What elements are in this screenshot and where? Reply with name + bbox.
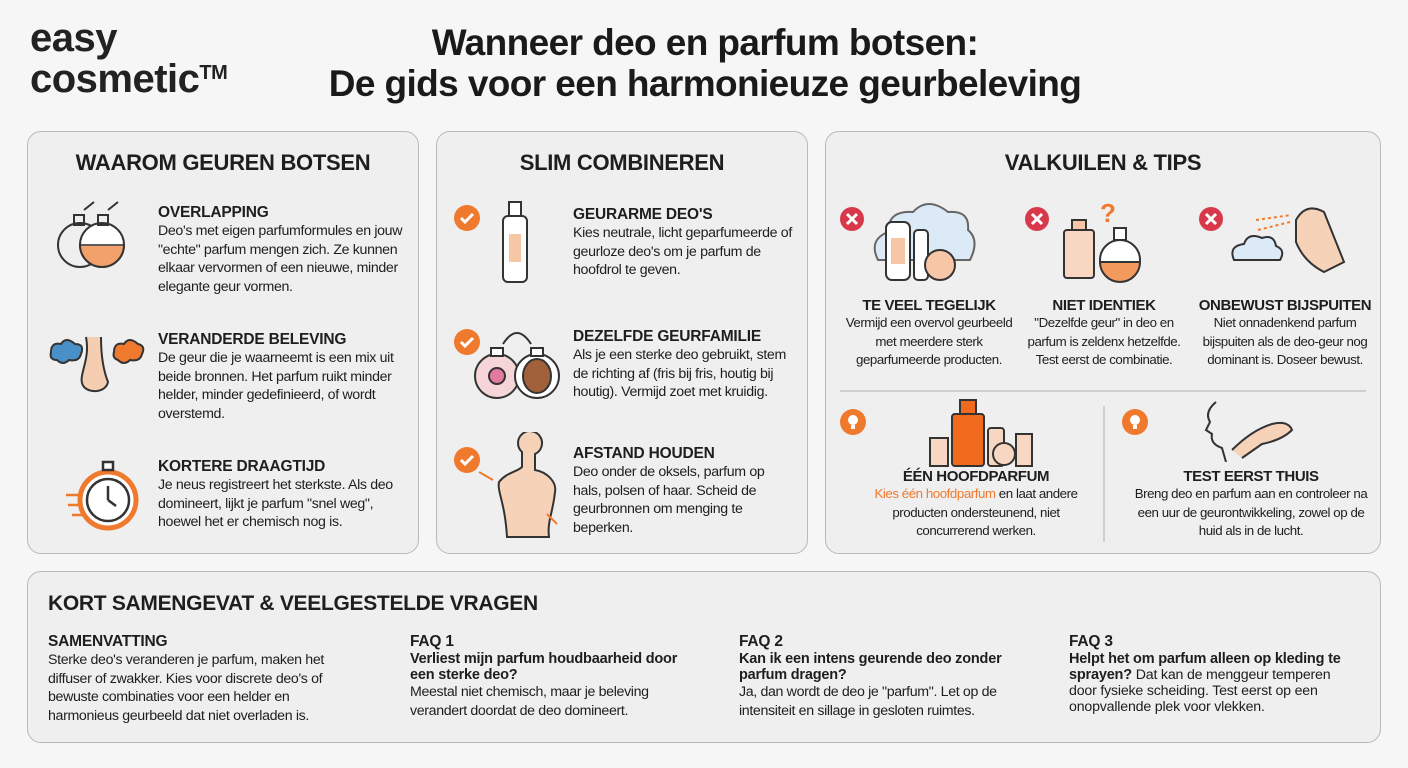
heading: KORT SAMENGEVAT & VEELGESTELDE VRAGEN — [48, 592, 538, 615]
icon: bulb 1 — [840, 409, 866, 435]
icon: bulb 2 — [1122, 409, 1148, 435]
icon: cloud products — [874, 203, 976, 281]
icon: check 1 — [454, 205, 480, 231]
text: faq 1: FAQ 1 — [410, 633, 454, 650]
icon: face and wrist — [1204, 401, 1294, 462]
logo: easy — [30, 16, 117, 60]
text: te veel tegelijk: TE VEEL TEGELIJK — [862, 297, 996, 314]
panel: kort samengevat & faq — [27, 571, 1381, 743]
text: samenvatting: SAMENVATTING — [48, 633, 167, 650]
title — [329, 22, 1081, 104]
icon: x 2 — [1025, 207, 1049, 231]
text: faq 3: Helpt het om parfum alleen op kleding te sprayen? Dat kan de menggeur temperen door fysieke scheiding. Test eerst op een onopvallende plek voor vlekken. — [1069, 651, 1341, 715]
text: kortere draagtijd: KORTERE DRAAGTIJD — [158, 458, 325, 475]
logo — [30, 16, 227, 101]
text: test eerst thuis: TEST EERST THUIS — [1183, 468, 1319, 485]
heading: SLIM COMBINEREN — [520, 150, 724, 175]
text: afstand houden: AFSTAND HOUDEN — [573, 445, 715, 462]
icon: hand spraying — [1231, 207, 1346, 274]
text: faq 2: Kan ik een intens geurende deo zonder parfum dragen? — [739, 651, 1002, 683]
text: niet identiek: "Dezelfde geur" in deo en parfum is zeldenx hetzelfde. Test eerst de combinatie. — [1028, 315, 1180, 367]
text: geurarme deo's: GEURARME DEO'S — [573, 206, 713, 223]
icon: product group — [929, 399, 1033, 467]
logo: cosmeticTM — [30, 57, 227, 101]
text: faq 2: Ja, dan wordt de deo je "parfum". Let op de intensiteit en sillage in gesloten ruimtes. — [739, 684, 997, 718]
icon: check 3 — [454, 447, 480, 473]
icon: nose with clouds — [50, 336, 144, 392]
text: faq 1 — [410, 633, 678, 718]
panel: slim combineren — [436, 131, 808, 554]
icon: x 1 — [840, 207, 864, 231]
text: faq 2: FAQ 2 — [739, 633, 783, 650]
text: veranderde beleving: De geur die je waarneemt is een mix uit beide bronnen. Het parfum ruikt minder helder, minder gedefinieerd, of wordt overstemd. — [158, 350, 394, 422]
icon: stopwatch — [66, 460, 138, 530]
icon: overlapping bottles — [57, 201, 125, 268]
text: geurarme deo's: Kies neutrale, licht geparfumeerde of geurloze deo's om je parfum de hoofdrol te geven. — [573, 225, 792, 278]
icon: x 3 — [1199, 207, 1223, 231]
text: faq 3: FAQ 3 — [1069, 633, 1113, 650]
text: samenvatting: Sterke deo's veranderen je parfum, maken het diffuser of zwakker. Kies voor discrete deo's of bewuste combinaties voor een helder en harmonieus geurbeeld dat niet overladen is. — [48, 652, 324, 724]
text: een hoofdparfum: Kies één hoofdparfum en laat andere producten ondersteunend, niet concurrerend werken. — [874, 486, 1078, 538]
heading: VALKUILEN & TIPS — [1005, 150, 1201, 175]
text: dezelfde geurfamilie: DEZELFDE GEURFAMILIE — [573, 328, 761, 345]
text: onbewust bijspuiten: Niet onnadenkend parfum bijspuiten als de deo-geur nog dominant is. Doseer bewust. — [1203, 315, 1367, 367]
text: overlapping: OVERLAPPING — [158, 204, 269, 221]
heading: WAAROM GEUREN BOTSEN — [76, 150, 370, 175]
icon: deo spray — [502, 201, 528, 283]
text: onbewust bijspuiten: ONBEWUST BIJSPUITEN — [1199, 297, 1371, 314]
text: kortere draagtijd: Je neus registreert het sterkste. Als deo domineert, lijkt je parfum "snel weg", hoewel het er chemisch nog is. — [158, 477, 393, 530]
text: overlapping: Deo's met eigen parfumformules en jouw "echte" parfum mengen zich. Ze kunnen elkaar vervormen of een nieuwe, minder elegante geur vormen. — [158, 223, 402, 294]
icon: check 2 — [454, 329, 480, 355]
icon: two bottles — [474, 332, 560, 399]
icon: body — [478, 432, 558, 538]
text: test eerst thuis: Breng deo en parfum aan en controleer na een uur de geurontwikkeling, zowel op de huid als in de lucht. — [1135, 486, 1367, 538]
text: te veel tegelijk: Vermijd een overvol geurbeeld met meerdere sterk geparfumeerde producten. — [846, 315, 1012, 367]
panel: valkuilen & tips — [825, 131, 1381, 554]
panel: waarom geuren botsen — [27, 131, 419, 554]
text: niet identiek: NIET IDENTIEK — [1052, 297, 1156, 314]
text: dezelfde geurfamilie: Als je een sterke deo gebruikt, stem de richting af (fris bij fris, houtig bij houtig). Vermijd zoet met kruidig. — [573, 347, 786, 400]
text: een hoofdparfum: ÉÉN HOOFDPARFUM — [903, 468, 1049, 485]
text: veranderde beleving: VERANDERDE BELEVING — [158, 331, 346, 348]
text: faq 1: Verliest mijn parfum houdbaarheid door een sterke deo? — [410, 651, 677, 683]
title: Wanneer deo en parfum botsen: — [432, 22, 978, 63]
text: faq 2 — [739, 633, 1002, 718]
icon: two bottles question — [1063, 200, 1141, 283]
title: De gids voor een harmonieuze geurbeleving — [329, 63, 1081, 104]
text: afstand houden: Deo onder de oksels, parfum op hals, polsen of haar. Scheid de geurbronnen om menging te beperken. — [573, 464, 764, 536]
text: faq 1: Meestal niet chemisch, maar je beleving verandert doordat de deo domineert. — [410, 684, 649, 718]
